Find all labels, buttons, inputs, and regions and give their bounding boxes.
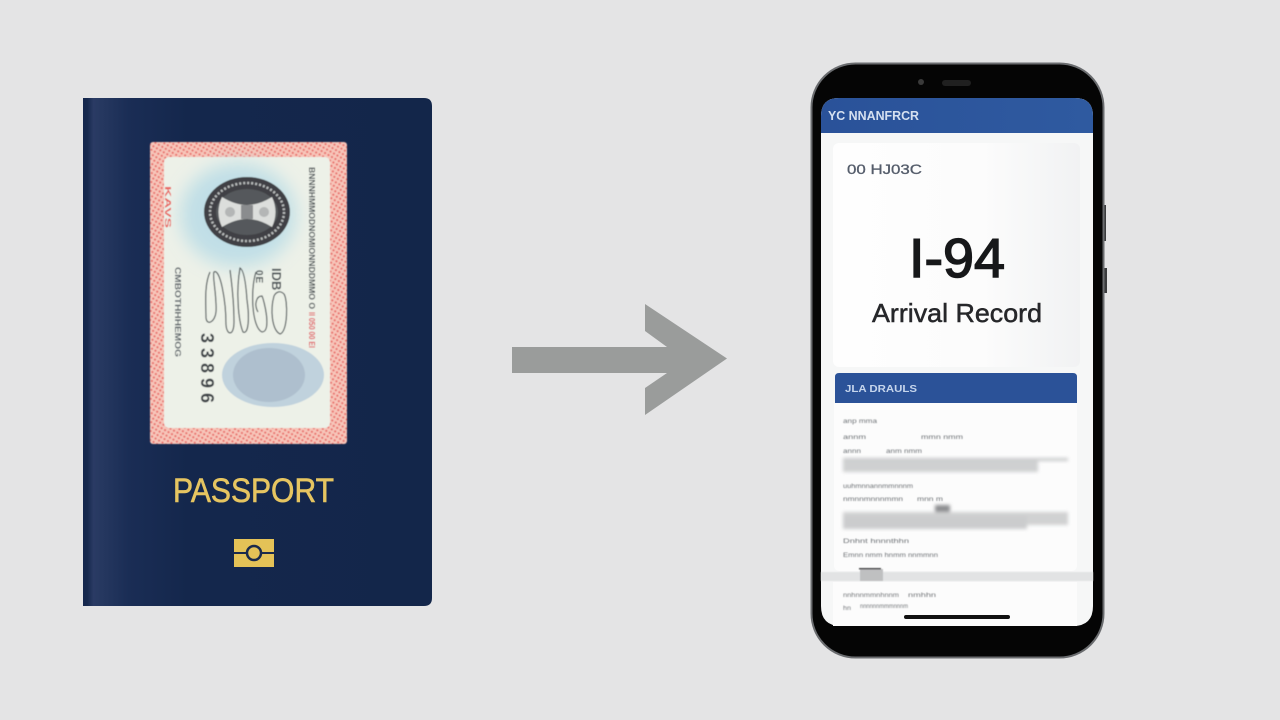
vertical microtext right: BNNNHMMODNOMIONNDDMMO O <box>307 167 317 309</box>
stamp digits near signature: 0E <box>253 270 264 284</box>
main I-94 card <box>833 143 1080 367</box>
passport data page <box>150 142 347 444</box>
I-94 heading: I-94 <box>909 227 1005 289</box>
seal emblem <box>204 177 290 247</box>
app header bar <box>821 98 1093 133</box>
red guilloche border <box>150 142 347 444</box>
vertical microtext left: CMBOTHHHEMOG <box>173 267 183 357</box>
small detail labels: Emnn nmm hnmm nnmmnn <box>843 552 938 559</box>
card reference code: 00 HJ03C <box>847 162 922 177</box>
small detail labels: anp mma <box>843 418 877 425</box>
phone screen <box>821 98 1093 626</box>
passport data page: IDB <box>269 268 284 290</box>
home indicator <box>904 615 1010 619</box>
passport label: PASSPORT <box>173 472 334 510</box>
side buttons <box>1103 205 1107 293</box>
passport <box>83 98 432 606</box>
arrival record label: Arrival Record <box>872 298 1042 328</box>
serial number: 33896 <box>197 333 217 403</box>
small detail labels: mmn nmm <box>921 434 963 441</box>
camera and speaker <box>918 79 971 86</box>
blurred data bars <box>843 458 1068 529</box>
small detail labels: annn <box>843 448 861 455</box>
lower card: nmhhn <box>908 592 937 599</box>
phone body <box>812 64 1104 658</box>
gray separator band <box>821 568 1093 581</box>
passport cover <box>83 98 432 606</box>
lower card: hn <box>843 605 851 612</box>
gold chip symbol <box>234 539 274 567</box>
pale security background <box>164 157 330 428</box>
lower card: nnhnnmmnhnnm <box>843 592 899 599</box>
small detail labels: Dnhnt hnnnthhn <box>843 538 910 545</box>
arrow <box>512 304 727 415</box>
vertical microtext right: II 050 00 EI <box>307 312 317 348</box>
details section <box>834 373 1077 571</box>
small detail labels: uuhmnnannmmnnnm <box>843 483 913 490</box>
screen background <box>821 98 1093 626</box>
hologram oval <box>222 343 324 407</box>
lower card <box>833 582 1077 626</box>
handwritten signature <box>206 268 287 334</box>
details header text: JLA DRAULS <box>845 383 917 395</box>
blue tint wash <box>180 163 296 267</box>
app header text: YC NNANFRCR <box>828 109 919 123</box>
lower card: nnnnnnmmmnnnm <box>860 603 908 610</box>
red side mark: KAVS <box>163 186 172 229</box>
small detail labels: mnn m <box>917 496 943 503</box>
small detail labels: annm <box>843 434 866 441</box>
small detail labels <box>843 418 963 559</box>
details header bar <box>835 373 1077 403</box>
small detail labels: nmnnmnnnmmn <box>843 496 903 503</box>
details card <box>834 403 1077 571</box>
small detail labels: anm nmm <box>886 448 922 455</box>
smartphone <box>812 64 1107 658</box>
